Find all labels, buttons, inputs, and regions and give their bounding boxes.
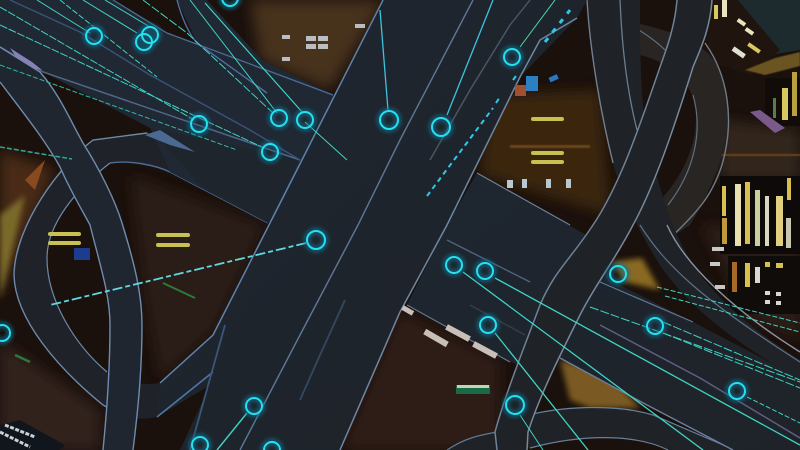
right ring ramp (622, 20, 728, 245)
building with lit windows right (720, 176, 800, 314)
green markings and lit building bottom left (0, 160, 195, 450)
lower right road band (407, 173, 800, 450)
top left road band (0, 0, 345, 223)
far right road to lower right (587, 0, 800, 380)
vertical S-curve road on left (0, 47, 142, 450)
S-curve road on right (495, 0, 712, 450)
left loop ramp (14, 133, 268, 419)
bottom curved ramp (447, 408, 735, 450)
buildings top right (705, 0, 800, 133)
rows of yellow lights (48, 117, 564, 247)
parked cars and vehicles (74, 24, 725, 394)
central highway band (157, 0, 587, 450)
